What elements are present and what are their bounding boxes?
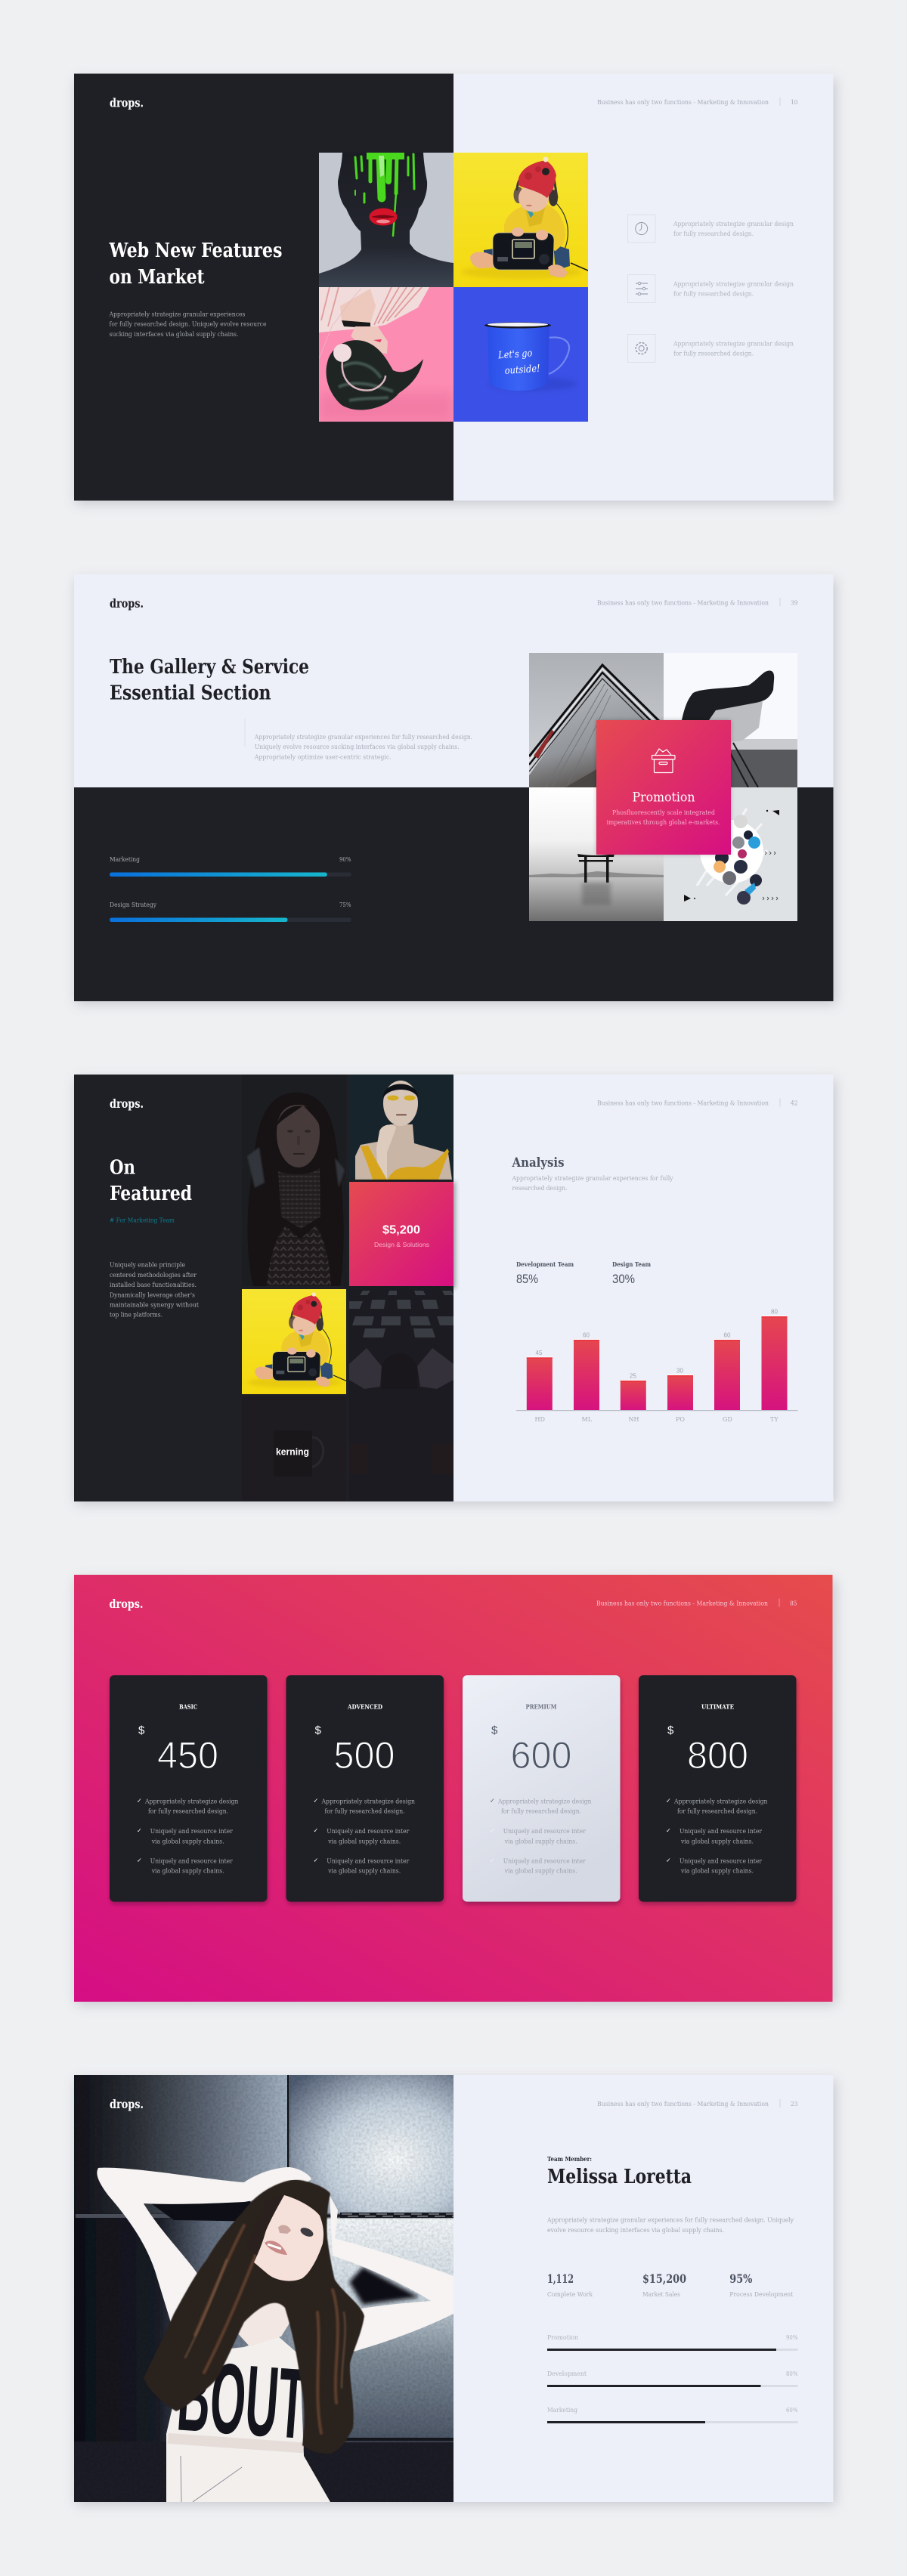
- photo: woman in yellow dress: [355, 1081, 452, 1180]
- card description: imperatives through global e-markets.: [606, 819, 720, 827]
- photo: team member portrait: BOUT: [174, 2340, 310, 2460]
- stat: development team: [516, 1261, 574, 1286]
- header tagline: 42: [791, 1100, 798, 1108]
- pricing card: advenced: Uniquely and resource inter: [327, 1857, 410, 1865]
- stat value: $5,200: [382, 1224, 420, 1237]
- stat: complete work: [547, 2271, 593, 2299]
- mug logo: kerning: [276, 1446, 309, 1457]
- axis labels: NH: [629, 1416, 639, 1423]
- logo: drops.: [110, 2097, 144, 2111]
- bar NH 25: 25: [630, 1372, 636, 1380]
- pricing card: premium: Appropriately strategize design: [497, 1798, 592, 1805]
- title: Essential Section: [110, 682, 271, 705]
- axis labels: GD: [723, 1416, 732, 1423]
- progress: marketing: Marketing: [547, 2407, 577, 2414]
- title: [110, 656, 309, 705]
- feature text 3: Appropriately strategize granular design: [673, 340, 794, 348]
- pricing card: basic: via global supply chains.: [151, 1868, 224, 1876]
- face: [246, 2195, 323, 2281]
- pricing card: premium: PREMIUM: [526, 1703, 557, 1711]
- progress: development: [547, 2370, 798, 2387]
- dark left half: [74, 1075, 454, 1501]
- progress: development: 80%: [786, 2370, 798, 2378]
- logo: drops.: [110, 596, 144, 611]
- progress: promotion: 90%: [786, 2334, 798, 2342]
- pricing card: premium: for fully researched design.: [501, 1808, 581, 1816]
- header tagline: Business has only two functions - Marketing & Innovation: [596, 1600, 768, 1608]
- progress: marketing: [547, 2407, 798, 2423]
- intro paragraph: [109, 311, 266, 339]
- pricing card: basic: [110, 1675, 268, 1904]
- feature text 3: [673, 340, 794, 358]
- stat: market sales: $15,200: [642, 2271, 686, 2286]
- feature text 2: Appropriately strategize granular design: [673, 281, 794, 289]
- header tagline: Business has only two functions - Marketing & Innovation: [597, 1100, 769, 1108]
- feature text 1: [673, 221, 794, 238]
- pricing card: advenced: for fully researched design.: [325, 1808, 405, 1816]
- progress: marketing: 90%: [339, 856, 351, 864]
- feature text 2: [673, 281, 794, 298]
- progress: design strategy: [110, 901, 351, 922]
- pink stat tile: [349, 1182, 456, 1288]
- pricing card: premium: Uniquely and resource inter: [503, 1857, 587, 1865]
- analysis description: Appropriately strategize granular experiences for fully: [512, 1175, 673, 1183]
- pricing card: basic: via global supply chains.: [151, 1838, 224, 1845]
- photo: team member portrait: [70, 2070, 459, 2506]
- header tagline: 10: [791, 99, 798, 107]
- chest: [236, 2276, 302, 2346]
- logo: drops.: [110, 1096, 144, 1111]
- intro paragraph: for fully researched design. Uniquely evolve resource: [109, 321, 266, 329]
- pricing card: basic: Uniquely and resource inter: [150, 1828, 234, 1835]
- shirt: [166, 2336, 330, 2502]
- axis labels: PO: [676, 1416, 685, 1423]
- intro paragraph: sucking interfaces via global supply chains.: [109, 331, 239, 339]
- pricing card: premium: Uniquely and resource inter: [503, 1828, 587, 1835]
- photo: dark building: [349, 1289, 454, 1501]
- pricing card: ultimate: Uniquely and resource inter: [679, 1857, 763, 1865]
- pricing card: advenced: ✓: [313, 1797, 318, 1804]
- header tagline: Business has only two functions - Marketing & Innovation: [597, 599, 769, 607]
- hand over hair: [253, 2167, 311, 2191]
- feature text 2: for fully researched design.: [673, 290, 754, 298]
- progress: promotion: [547, 2334, 798, 2351]
- card description: Phosfluorescently scale integrated: [612, 809, 715, 817]
- mug lettering: Let's go: [497, 348, 533, 361]
- pricing card: premium: ✓: [490, 1857, 495, 1863]
- stat: market sales: [642, 2271, 686, 2299]
- analysis description: [512, 1175, 673, 1192]
- bar ML 60: [574, 1331, 599, 1410]
- bio paragraph: [546, 2217, 794, 2234]
- axis labels: TY: [770, 1416, 779, 1423]
- light top band: [74, 574, 833, 787]
- bar PO 30: 30: [676, 1368, 683, 1374]
- title: On: [110, 1157, 135, 1180]
- icon: storage box: [652, 749, 675, 772]
- pricing card: basic: 450: [157, 1734, 218, 1777]
- photo: blue enamel mug: [454, 287, 588, 422]
- paragraph with rule: [245, 718, 472, 762]
- photo: dark portrait: [248, 1093, 345, 1286]
- pricing card: advenced: 500: [334, 1734, 395, 1777]
- photo: woman with headphones on pink: [319, 287, 454, 422]
- pricing card: advenced: ADVENCED: [347, 1703, 382, 1711]
- header tagline: Business has only two functions - Marketing & Innovation: [597, 99, 769, 107]
- axis labels: ML: [582, 1416, 593, 1423]
- pricing card: ultimate: via global supply chains.: [680, 1838, 754, 1845]
- icon: gear: [627, 334, 655, 363]
- axis labels: HD: [535, 1416, 545, 1423]
- analysis heading: Analysis: [512, 1155, 564, 1170]
- paragraph with rule: Appropriately optimize user-centric strategic.: [254, 754, 392, 762]
- mug lettering: [498, 351, 540, 374]
- stat label: Design & Solutions: [374, 1241, 429, 1248]
- progress: design strategy: 75%: [339, 901, 351, 909]
- tag: # For Marketing Team: [110, 1217, 175, 1225]
- pricing card: ultimate: $: [667, 1724, 674, 1737]
- feature text 1: for fully researched design.: [673, 230, 754, 238]
- photo: baby on yellow: [242, 1289, 347, 1394]
- pricing card: advenced: $: [314, 1724, 322, 1737]
- body paragraph: [110, 1262, 200, 1319]
- title: [109, 240, 283, 289]
- body paragraph: maintainable synergy without: [110, 1301, 200, 1309]
- photo: torii in water: [529, 787, 664, 921]
- paragraph with rule: Appropriately strategize granular experiences for fully researched design.: [254, 734, 472, 741]
- slide 4: pricing: [74, 1575, 836, 2005]
- header tagline: 39: [791, 599, 798, 607]
- pricing card: advenced: via global supply chains.: [327, 1868, 401, 1876]
- pricing card: advenced: [286, 1675, 444, 1904]
- feature text 3: for fully researched design.: [673, 351, 754, 358]
- gradient background: [74, 1575, 833, 2002]
- pricing card: basic: ✓: [137, 1797, 142, 1804]
- logo: drops.: [110, 95, 144, 110]
- bar NH 25: [621, 1372, 646, 1410]
- paragraph with rule: Uniquely evolve resource sucking interfaces via global supply chains.: [255, 744, 460, 751]
- card heading: Promotion: [632, 790, 695, 805]
- icon: clock: [627, 215, 655, 243]
- light right half: [454, 1075, 833, 1501]
- hair: [144, 2179, 364, 2454]
- stat: development team: Development Team: [516, 1261, 574, 1269]
- stat: market sales: Market Sales: [642, 2291, 680, 2299]
- pricing card: premium: ✓: [490, 1797, 495, 1804]
- axis labels: [535, 1416, 779, 1423]
- photo: architecture: [529, 653, 664, 787]
- stat: process development: [729, 2271, 794, 2299]
- pricing card: ultimate: ✓: [666, 1827, 671, 1834]
- stat: process development: Process Development: [729, 2291, 794, 2299]
- bio paragraph: evolve resource sucking interfaces via global supply chains.: [547, 2227, 724, 2234]
- title: Featured: [110, 1183, 192, 1205]
- stat: complete work: 1,112: [547, 2271, 574, 2286]
- progress: marketing: 60%: [786, 2407, 798, 2414]
- pricing card: advenced: Uniquely and resource inter: [327, 1828, 410, 1835]
- pricing card: advenced: via global supply chains.: [327, 1838, 401, 1845]
- slide 2: gallery and service: [74, 574, 836, 1004]
- pricing card: premium: via global supply chains.: [504, 1868, 577, 1876]
- right arm: [330, 2195, 454, 2352]
- header tagline: Business has only two functions - Marketing & Innovation: [597, 2101, 769, 2108]
- pricing card: ultimate: ✓: [666, 1797, 671, 1804]
- light right half: [454, 74, 833, 500]
- light right half: [454, 2075, 833, 2502]
- body paragraph: installed base functionalities.: [110, 1282, 197, 1289]
- photo: baby with radio: [454, 153, 588, 287]
- title: on Market: [109, 266, 204, 289]
- torii gate: [577, 854, 614, 883]
- dark bottom band: [74, 787, 833, 1001]
- slide 3: on featured and analysis: [74, 1075, 836, 1504]
- stat: complete work: Complete Work: [547, 2291, 593, 2299]
- pricing card: basic: BASIC: [179, 1703, 197, 1711]
- stat: development team: 85%: [516, 1272, 538, 1286]
- pricing card: ultimate: Uniquely and resource inter: [679, 1828, 763, 1835]
- progress: development: Development: [547, 2370, 587, 2378]
- stat: process development: 95%: [729, 2271, 752, 2286]
- title: Web New Features: [109, 240, 283, 262]
- left arm: [97, 2167, 311, 2327]
- pricing card: advenced: Appropriately strategize design: [321, 1798, 415, 1805]
- pricing card: ultimate: [639, 1675, 797, 1904]
- pricing card: ultimate: for fully researched design.: [677, 1808, 757, 1816]
- pricing card: ultimate: via global supply chains.: [680, 1868, 754, 1876]
- pricing card: basic: for fully researched design.: [148, 1808, 228, 1816]
- card description: [606, 809, 720, 827]
- promotion card: [596, 720, 731, 855]
- stat: design team: [612, 1261, 651, 1286]
- analysis description: researched design.: [512, 1185, 567, 1192]
- bar GD 60: 60: [724, 1331, 731, 1339]
- bar HD 45: [527, 1350, 553, 1410]
- pricing card: basic: ✓: [137, 1857, 142, 1863]
- bar HD 45: 45: [535, 1350, 543, 1356]
- feature text 1: Appropriately strategize granular design: [673, 221, 794, 228]
- intro paragraph: Appropriately strategize granular experiences: [109, 311, 245, 318]
- photo: dark kerning mug: [242, 1396, 346, 1501]
- mug lettering: outside!: [504, 363, 540, 377]
- pricing card: premium: ✓: [490, 1827, 495, 1834]
- pricing card: advenced: ✓: [313, 1827, 318, 1834]
- slide 1: web new features: [74, 74, 836, 504]
- pricing card: ultimate: 800: [687, 1734, 748, 1777]
- pricing card: ultimate: ✓: [666, 1857, 671, 1863]
- logo: drops.: [109, 1597, 144, 1611]
- progress: marketing: [110, 856, 351, 877]
- bar chart: [516, 1309, 798, 1423]
- pricing card: ultimate: Appropriately strategize design: [673, 1798, 768, 1805]
- body paragraph: Uniquely enable principle: [110, 1262, 185, 1269]
- title: [110, 1157, 192, 1205]
- dark left half: [74, 74, 454, 500]
- icon: sliders: [627, 275, 655, 302]
- photo: painted face: [319, 153, 454, 287]
- graphic: abstract pattern circles: [664, 787, 797, 921]
- stat: design team: 30%: [612, 1272, 635, 1286]
- header tagline: 23: [791, 2101, 798, 2108]
- body paragraph: top line platforms.: [110, 1312, 163, 1319]
- pricing card: premium: via global supply chains.: [504, 1838, 577, 1845]
- pricing card: premium: [463, 1675, 621, 1904]
- progress: design strategy: Design Strategy: [110, 901, 156, 909]
- progress: promotion: Promotion: [547, 2334, 578, 2342]
- pricing card: premium: 600: [511, 1734, 571, 1777]
- pricing card: basic: $: [138, 1724, 145, 1737]
- bio paragraph: Appropriately strategize granular experiences for fully researched design. Uniquely: [546, 2217, 794, 2225]
- photo: chair: [664, 653, 797, 787]
- pricing card: ultimate: ULTIMATE: [701, 1703, 734, 1711]
- slide 5: team member: [70, 2070, 836, 2506]
- pricing card: basic: Appropriately strategize design: [144, 1798, 239, 1805]
- team member label: Team Member:: [547, 2156, 592, 2163]
- stat: design team: Design Team: [612, 1261, 651, 1269]
- progress: marketing: Marketing: [110, 856, 140, 864]
- title: The Gallery & Service: [110, 656, 309, 679]
- bar GD 60: [714, 1331, 740, 1410]
- header tagline: 85: [790, 1600, 797, 1608]
- body paragraph: Dynamically leverage other's: [110, 1291, 195, 1299]
- bar PO 30: [667, 1368, 693, 1410]
- bar TY 80: [762, 1309, 788, 1410]
- pricing card: advenced: ✓: [313, 1857, 318, 1863]
- team member name: Melissa Loretta: [547, 2166, 692, 2188]
- bar ML 60: 60: [583, 1331, 590, 1339]
- pricing card: basic: ✓: [137, 1827, 142, 1834]
- pricing card: premium: $: [491, 1724, 498, 1737]
- bar TY 80: 80: [771, 1309, 778, 1315]
- pricing card: basic: Uniquely and resource inter: [150, 1857, 234, 1865]
- body paragraph: centered methodologies after: [110, 1272, 197, 1279]
